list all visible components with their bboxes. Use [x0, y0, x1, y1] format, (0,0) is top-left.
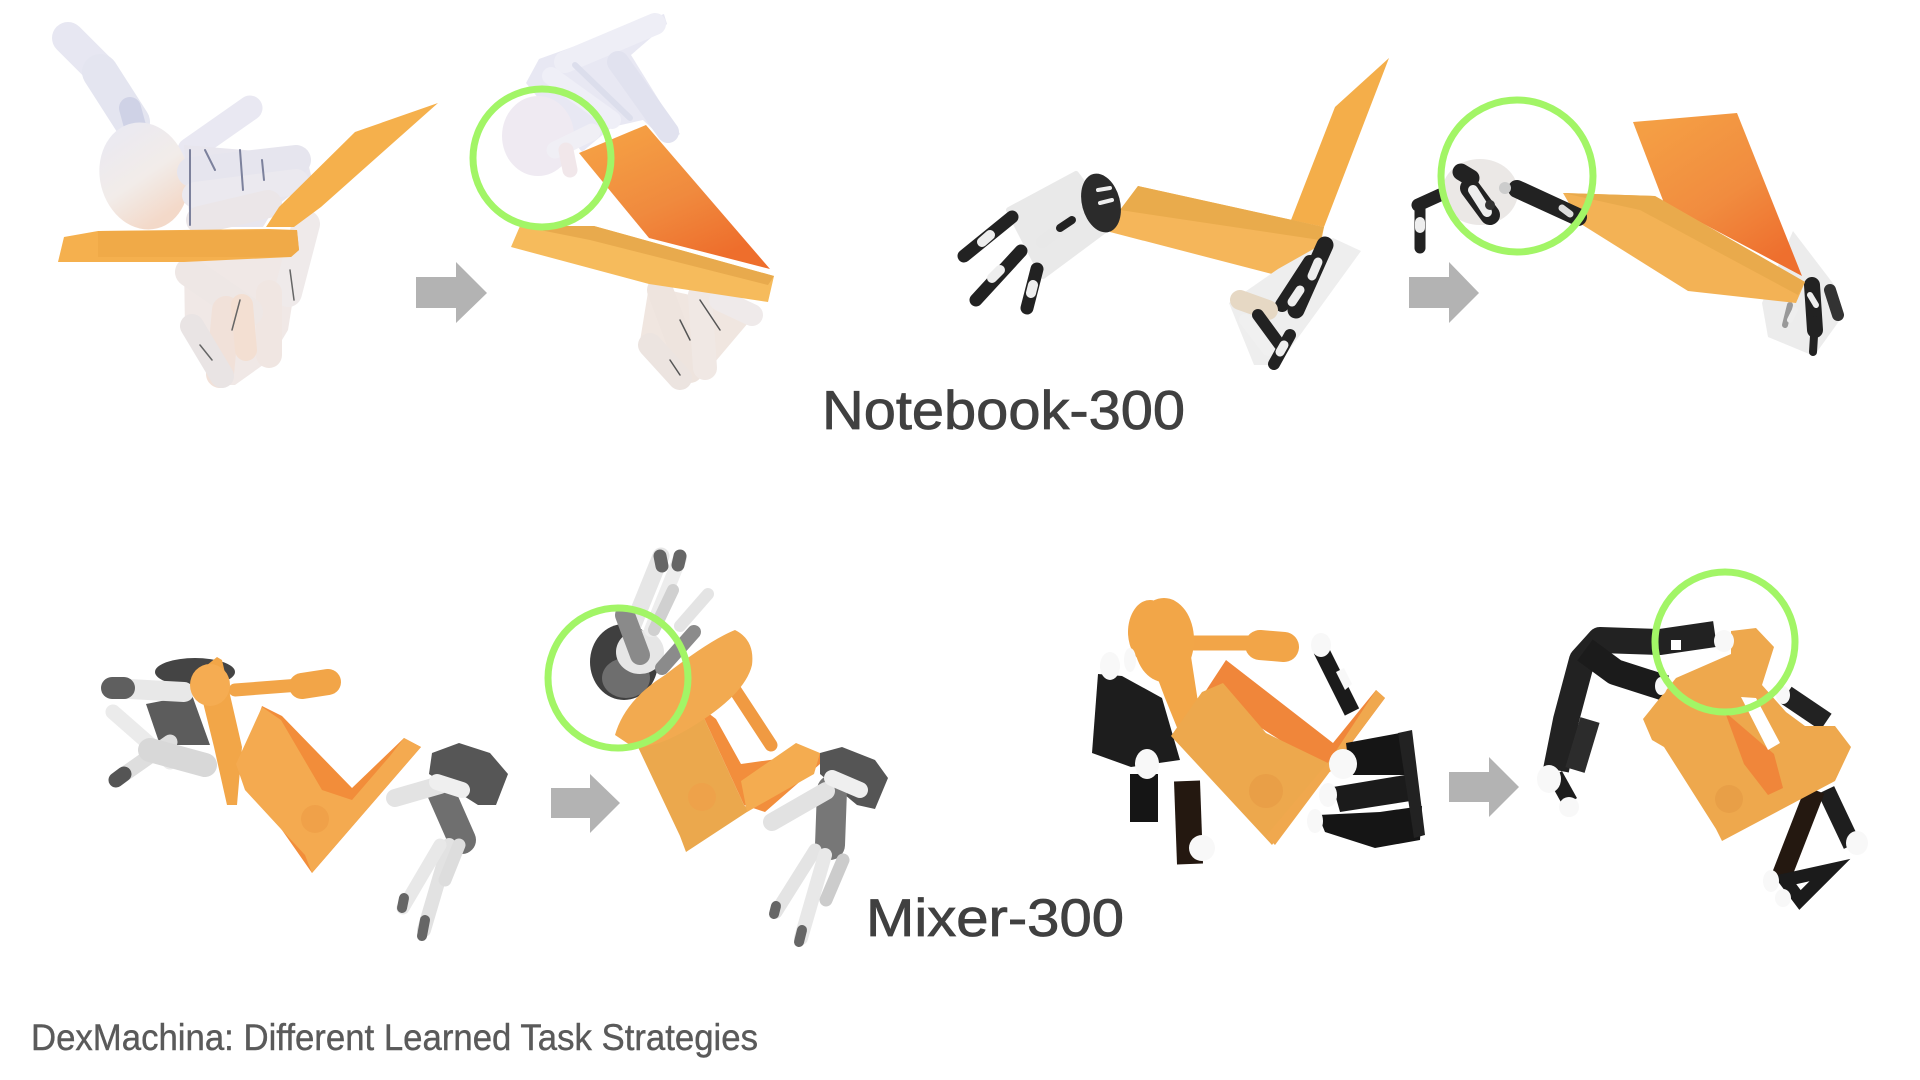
icon: lower robot hand: [1229, 238, 1361, 365]
mixer plate and disc: [196, 657, 242, 805]
icon: black arm left: [1555, 634, 1715, 802]
caption: DexMachina: Different Learned Task Strategies: [31, 1017, 758, 1058]
notebook base: [1110, 186, 1324, 274]
callout: notebook human circle: [473, 89, 611, 227]
mixer lower plate: [741, 743, 820, 812]
mixer front panel: [1171, 683, 1330, 845]
mixer front panel: [236, 707, 421, 873]
panel: notebook human hand closed: [58, 38, 438, 385]
icon: right hand with wheel: [395, 743, 508, 936]
icon: upper gray hand: [590, 556, 708, 700]
mixer right plate: [1266, 690, 1385, 845]
panel: mixer hand closed: [112, 657, 508, 936]
mixer front panel: [637, 705, 750, 852]
mixer inner body: [698, 705, 820, 812]
notebook base tilted: [511, 226, 774, 302]
icon: black hand left: [1092, 674, 1190, 864]
panel: notebook human hand opened: [502, 14, 774, 384]
callout: mixer right circle: [1655, 572, 1795, 712]
callout: mixer left circle: [548, 608, 688, 748]
icon: lower fingers: [640, 286, 759, 384]
title: Notebook-300: Notebook-300: [822, 379, 1185, 441]
arrow: mixer right: [1449, 757, 1519, 817]
icon: lower fingers behind notebook: [184, 224, 306, 385]
notebook lid opened: [1633, 113, 1802, 276]
mixer inner body: [1205, 660, 1385, 772]
icon: black finger blocks right: [1318, 730, 1425, 848]
mixer inner body: [1725, 712, 1783, 795]
mixer top plate: [615, 630, 752, 747]
panel: mixer black hand closed: [1092, 598, 1425, 864]
panel: mixer black hand opened: [1537, 628, 1868, 907]
notebook base tilted: [1563, 193, 1805, 303]
icon: right hand with wheel: [772, 747, 888, 942]
mixer stick and bulb: [1190, 643, 1284, 647]
arrow: notebook robot: [1409, 262, 1479, 323]
icon: upper robot hand: [1418, 159, 1578, 248]
mixer gap: [1741, 697, 1780, 750]
mixer rod: [735, 690, 771, 745]
icon: upper hand reaching lid: [502, 14, 680, 176]
icon: mixer stick and bulb: [235, 682, 328, 690]
notebook lid side: [266, 103, 438, 227]
notebook lid upright: [1291, 58, 1389, 227]
icon: black arm right: [1780, 695, 1852, 900]
arrow: mixer left: [551, 774, 620, 833]
title: Mixer-300: Mixer-300: [866, 889, 1124, 948]
icon: black finger up: [1321, 650, 1352, 712]
panel: notebook robot hand opened: [1418, 113, 1842, 356]
panel: mixer hand opened: [590, 556, 888, 942]
callout: notebook robot circle: [1441, 100, 1593, 252]
icon: lower robot hand: [1762, 231, 1842, 356]
icon: upper hand with thumb and fingers: [68, 38, 312, 239]
icon: left robot hand: [964, 169, 1127, 308]
icon: white fingertips: [1100, 633, 1357, 861]
mixer plate: [1128, 598, 1200, 730]
notebook base: [58, 229, 299, 262]
panel: notebook robot hand closed: [964, 58, 1389, 365]
icon: left gray hand: [112, 658, 235, 780]
mixer inner body: [240, 706, 421, 873]
notebook lid opened: [579, 125, 770, 269]
icon: white fingertips: [1537, 630, 1868, 907]
mixer body silhouette: [1643, 628, 1851, 841]
arrow: notebook human: [416, 262, 487, 323]
